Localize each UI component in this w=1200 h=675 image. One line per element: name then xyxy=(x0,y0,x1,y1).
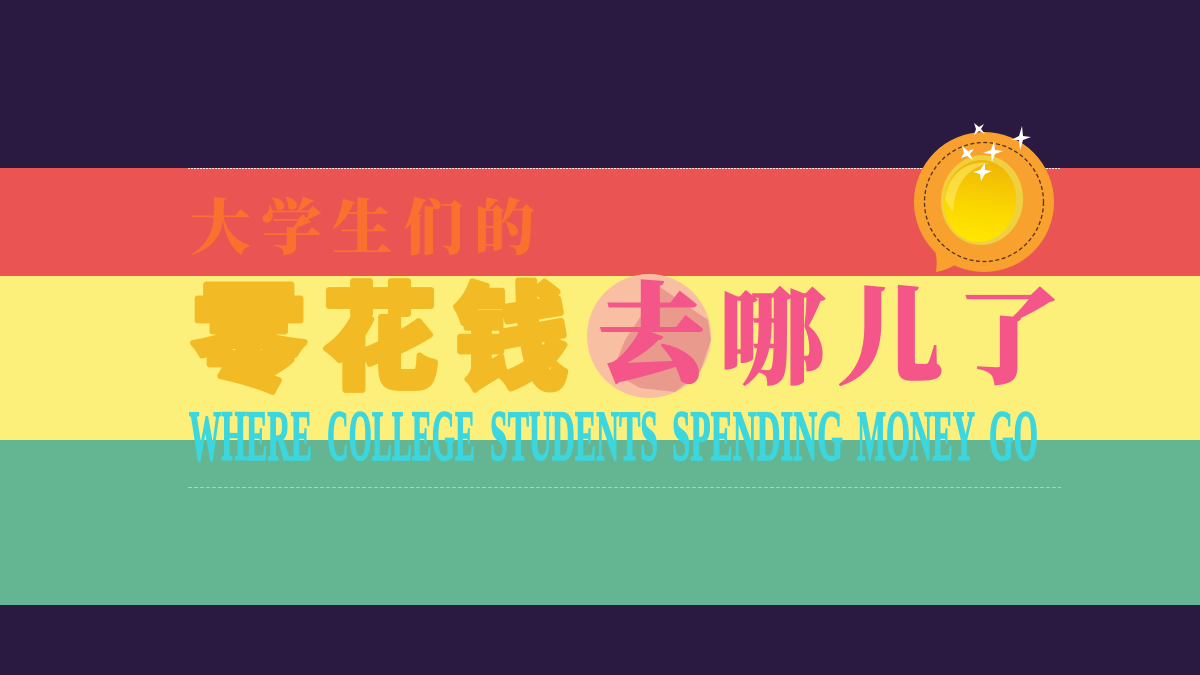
english subtitle: SPENDING xyxy=(672,396,843,476)
english subtitle xyxy=(189,396,1038,476)
english subtitle: STUDENTS xyxy=(490,396,658,476)
heading: pink characters: 哪儿了 xyxy=(720,281,1074,398)
heading: yellow characters: 零花钱 xyxy=(192,277,585,404)
circle badge with character: 去 xyxy=(597,278,713,397)
icon: gold coin speech bubble xyxy=(914,123,1054,272)
text: GO xyxy=(989,396,1038,476)
english subtitle: WHERE xyxy=(189,396,312,476)
heading: line one: 大学生们的 xyxy=(190,195,545,263)
icon: sparkles xyxy=(961,123,1031,181)
english subtitle: COLLEGE xyxy=(327,396,475,476)
english subtitle: MONEY xyxy=(857,396,975,476)
